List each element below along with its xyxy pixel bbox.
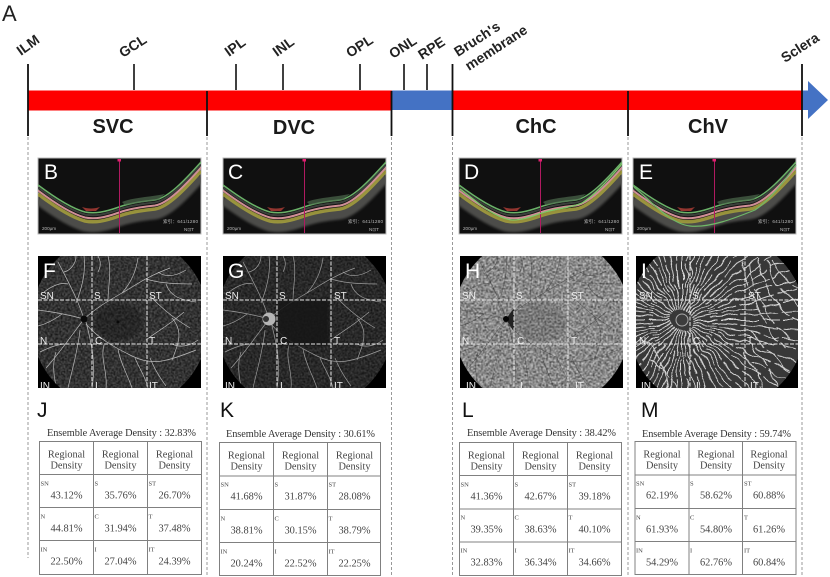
density table J: 44.81%	[50, 524, 83, 534]
density table J: Regional	[48, 450, 85, 460]
en-face panel G	[223, 256, 386, 389]
en-face panel G: N	[225, 336, 232, 347]
density table K: S	[274, 482, 278, 488]
density table K: Regional	[282, 450, 319, 462]
en-face panel G: ST	[334, 291, 347, 302]
density table M: Regional	[750, 450, 788, 460]
en-face panel F: N	[40, 336, 47, 347]
density table K: SN	[220, 482, 229, 488]
OCT panel D	[459, 158, 622, 234]
density table K	[220, 442, 380, 576]
en-face panel G: SN	[225, 291, 239, 302]
en-face panel I	[636, 256, 798, 389]
density table K: Density	[338, 462, 371, 472]
en-face panel H: H	[465, 260, 480, 283]
density table M: IT	[744, 548, 750, 554]
density table L: Regional	[522, 450, 559, 462]
en-face panel G: S	[279, 291, 286, 302]
OCT panel D: N⊡T	[605, 227, 615, 232]
density table M: 58.62%	[700, 490, 732, 502]
en-face panel I: SN	[639, 291, 653, 302]
density table L: IN	[460, 548, 468, 554]
density table M: S	[690, 480, 694, 488]
section heading SVC: SVC	[92, 116, 134, 138]
en-face panel G: IT	[334, 381, 343, 392]
density title M: Ensemble Average Density : 59.74%	[642, 429, 791, 440]
OCT panel E: 200μm	[637, 226, 651, 231]
density table M: Density	[753, 460, 786, 472]
density table J: N	[40, 514, 46, 520]
density table M: Density	[700, 460, 733, 472]
en-face panel F: C	[95, 336, 102, 347]
density title L: Ensemble Average Density : 38.42%	[467, 428, 616, 439]
density table L: Regional	[576, 450, 613, 462]
density table L: 41.36%	[470, 492, 503, 502]
en-face panel H: SN	[462, 291, 476, 302]
density table K: Density	[230, 462, 263, 472]
en-face panel G: T	[334, 336, 340, 347]
dashed column guides	[28, 137, 802, 577]
density table L: S	[514, 482, 518, 488]
density table L: 39.18%	[578, 492, 611, 502]
en-face panel H: C	[517, 336, 524, 347]
en-face panel F	[38, 256, 201, 389]
density table M: 60.84%	[753, 558, 785, 568]
density title K: Ensemble Average Density : 30.61%	[226, 429, 375, 440]
density table J: IN	[40, 546, 48, 554]
en-face panel G: G	[228, 260, 244, 283]
en-face panel I: IN	[641, 381, 651, 392]
density table K: 22.52%	[284, 558, 317, 570]
en-face panel I: S	[692, 291, 699, 302]
panel letter K: K	[220, 399, 234, 422]
OCT panel C	[223, 158, 386, 234]
density table K: 30.15%	[284, 526, 317, 536]
density table M: 60.88%	[753, 490, 785, 502]
density table M: Density	[646, 460, 679, 472]
panel letter L: L	[462, 399, 474, 422]
en-face panel I: C	[693, 336, 700, 347]
label RPE: RPE	[415, 33, 448, 63]
density table M: IN	[636, 548, 643, 554]
density table L: 40.10%	[578, 524, 611, 536]
panel letter J: J	[37, 399, 48, 422]
blue bar: outer retina	[392, 90, 453, 110]
layer axis	[28, 64, 828, 136]
density table L: 32.83%	[470, 558, 503, 568]
density table K: Regional	[228, 450, 265, 462]
panel label A: A	[2, 1, 17, 26]
arrow head	[802, 81, 828, 119]
label ILM: ILM	[13, 31, 42, 58]
density table J: 24.39%	[158, 556, 191, 568]
en-face panel F: IT	[149, 381, 158, 392]
OCT panel C: C	[228, 161, 243, 184]
density table M: ST	[744, 480, 752, 488]
label ONL: ONL	[386, 32, 420, 62]
density table M: 61.93%	[646, 524, 678, 536]
OCT panel D: 索引：641/1280	[584, 218, 619, 225]
density table M	[635, 442, 796, 574]
density table M: Regional	[643, 450, 681, 460]
density table L: SN	[460, 482, 469, 488]
en-face panel H: S	[516, 291, 523, 302]
density table L: 34.66%	[578, 558, 611, 568]
en-face panel H: T	[571, 336, 577, 347]
density table J: 37.48%	[158, 524, 191, 534]
OCT panel B: 索引：641/1280	[163, 218, 198, 225]
en-face panel F: T	[149, 336, 155, 347]
en-face panel F: F	[43, 260, 56, 283]
red bar: inner retina	[28, 90, 392, 110]
density table L: I	[514, 548, 517, 554]
en-face panel F: ST	[149, 291, 162, 302]
OCT panel C: 200μm	[227, 226, 241, 231]
en-face panel G: I	[280, 381, 283, 392]
OCT panel D: 200μm	[463, 226, 477, 231]
en-face panel F: I	[95, 381, 98, 392]
OCT panel E: N⊡T	[780, 227, 790, 232]
density table K: Regional	[336, 450, 373, 462]
en-face panel H: ST	[571, 291, 584, 302]
density table J: T	[148, 514, 152, 520]
density table L: Density	[578, 462, 611, 472]
en-face panel I: ST	[748, 291, 761, 302]
density table J: Density	[104, 460, 137, 472]
density table M: I	[690, 548, 692, 554]
density table J: 27.04%	[104, 556, 137, 568]
density table M: C	[690, 514, 694, 522]
density table L: N	[460, 514, 466, 522]
en-face panel F: S	[94, 291, 101, 302]
OCT panel C: N⊡T	[369, 227, 379, 232]
density table J: C	[94, 514, 99, 520]
label GCL: GCL	[116, 31, 150, 61]
density table M: Regional	[697, 450, 735, 460]
density table K: ST	[328, 482, 336, 488]
OCT panel B: 200μm	[42, 226, 56, 231]
label Sclera: Sclera	[778, 29, 822, 66]
density table K: 22.25%	[338, 558, 371, 570]
density table J: Regional	[156, 450, 193, 460]
density table K: 31.87%	[284, 492, 317, 502]
en-face panel G: IN	[225, 381, 235, 392]
en-face panel H: N	[462, 336, 469, 347]
density table K: 38.81%	[230, 526, 263, 536]
density table J: 43.12%	[50, 490, 83, 502]
en-face panel G: C	[280, 336, 287, 347]
density table K: 41.68%	[230, 492, 263, 502]
label INL: INL	[269, 33, 297, 59]
density table M: 54.29%	[646, 558, 678, 568]
en-face panel H: IN	[466, 381, 476, 392]
density table L: Regional	[468, 450, 505, 462]
density table M: 61.26%	[753, 524, 785, 536]
density table L	[460, 442, 622, 576]
density table K: IT	[328, 548, 335, 556]
density table J: 26.70%	[158, 490, 191, 502]
density table K: 38.79%	[338, 526, 371, 536]
density table L: Density	[470, 462, 503, 472]
red bar: choroid	[452, 90, 803, 110]
OCT panel B	[38, 158, 201, 234]
density table L: IT	[568, 548, 575, 554]
density table K: 20.24%	[230, 558, 263, 570]
OCT panel B: B	[44, 161, 58, 184]
density table M: T	[744, 514, 748, 522]
en-face panel I: I	[641, 260, 647, 283]
en-face panel F: SN	[40, 291, 54, 302]
label IPL: IPL	[221, 33, 249, 59]
en-face panel H: I	[520, 381, 523, 392]
label Bruch's: Bruch's	[451, 18, 503, 60]
density table K: IN	[220, 548, 228, 556]
density table K: C	[274, 516, 279, 522]
en-face panel I: T	[747, 336, 753, 347]
density table K: 28.08%	[338, 492, 371, 502]
density table J: 31.94%	[104, 524, 137, 534]
section heading ChC: ChC	[515, 116, 557, 138]
density table L: T	[568, 514, 572, 522]
layer labels	[13, 18, 822, 74]
OCT panel C: 索引：641/1280	[348, 218, 383, 225]
en-face panel H	[460, 256, 623, 389]
density table L: 36.34%	[524, 558, 557, 568]
OCT panel E	[633, 158, 796, 234]
density table M: SN	[636, 480, 645, 488]
boundary lines	[28, 64, 802, 136]
OCT panel B: N⊡T	[184, 227, 194, 232]
en-face panel I: N	[639, 336, 646, 347]
density table J: ST	[148, 480, 156, 488]
en-face panel H: IT	[575, 381, 584, 392]
density table L: 38.63%	[524, 524, 557, 536]
density table J: Regional	[102, 450, 139, 460]
density table J: I	[94, 546, 97, 554]
panel letter M: M	[641, 399, 658, 422]
density table K: Density	[284, 462, 317, 472]
section heading ChV: ChV	[688, 116, 729, 138]
density table M: 54.80%	[700, 524, 732, 536]
OCT panel E: 索引：641/1280	[758, 218, 793, 225]
density table L: 42.67%	[524, 492, 557, 502]
layer tick marks	[134, 64, 427, 90]
density table J: SN	[40, 480, 49, 488]
density table M: 62.19%	[646, 490, 678, 502]
density table J: S	[94, 480, 98, 488]
density table J: 22.50%	[50, 556, 83, 568]
density table M: 62.76%	[700, 558, 732, 568]
en-face panel F: IN	[40, 381, 50, 392]
density table L: C	[514, 514, 519, 522]
label OPL: OPL	[343, 31, 376, 61]
density table M: N	[636, 514, 641, 522]
OCT panel D: D	[464, 161, 479, 184]
density table J: 35.76%	[104, 490, 137, 502]
label membrane: membrane	[462, 21, 530, 74]
density table L: ST	[568, 482, 576, 488]
density table K: T	[328, 516, 332, 522]
section heading DVC: DVC	[273, 117, 315, 139]
density title J: Ensemble Average Density : 32.83%	[47, 428, 196, 439]
density table J: Density	[158, 460, 191, 472]
en-face panel I: IT	[750, 381, 759, 392]
density table J	[40, 442, 202, 574]
density table L: 39.35%	[470, 524, 503, 536]
density table J: IT	[148, 546, 155, 554]
OCT panel E: E	[639, 161, 653, 184]
density table K: N	[220, 516, 226, 522]
en-face panel I: I	[696, 381, 699, 392]
density table K: I	[274, 548, 277, 556]
density table L: Density	[524, 462, 557, 472]
density table J: Density	[50, 460, 83, 472]
